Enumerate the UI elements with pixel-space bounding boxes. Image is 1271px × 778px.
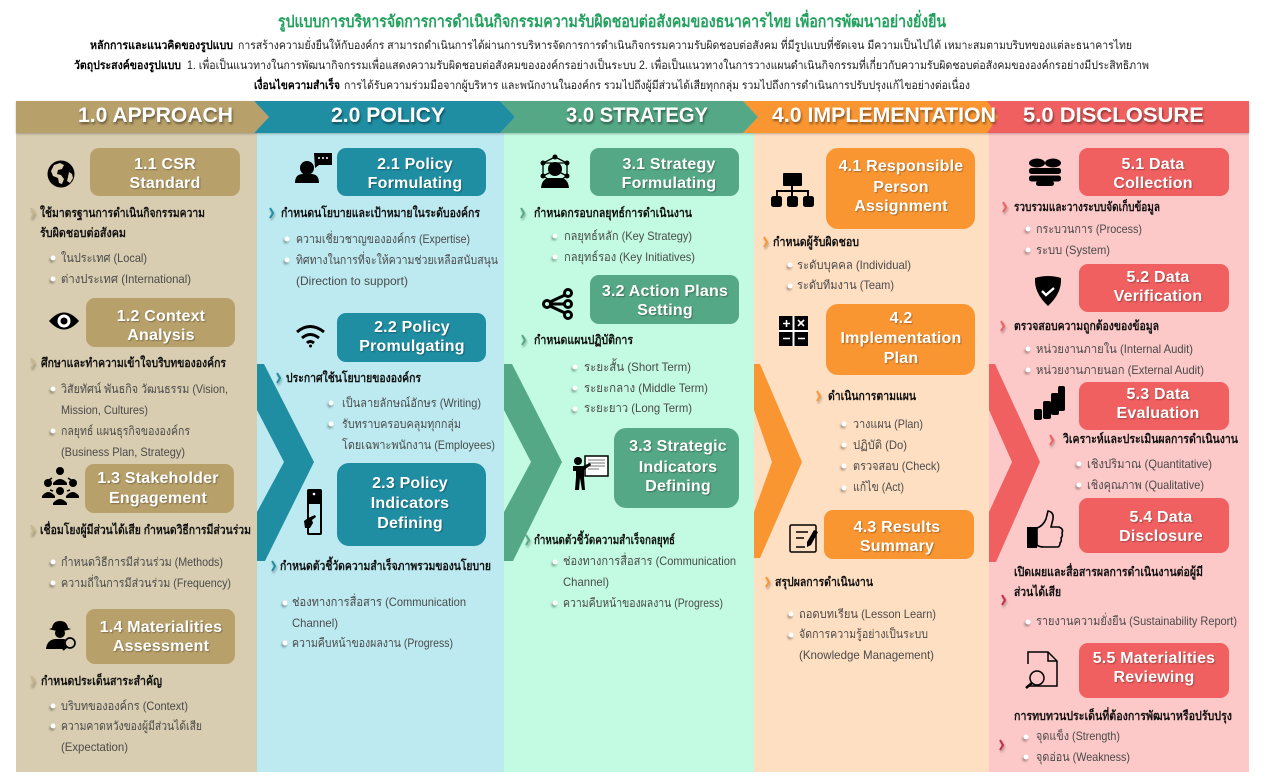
text: 3.2: ระยะยาว (Long Term) [584, 401, 692, 415]
box: 4.2 Implementation Plan: Implementation [840, 330, 962, 347]
text: 5.2: หน่วยงานภายนอก (External Audit) [1036, 363, 1204, 377]
icon: wifi [297, 326, 324, 348]
text: 1.2: Mission, Cultures) [61, 403, 148, 417]
text: 5.4 [1002, 563, 1237, 628]
text: 4.3 [766, 575, 936, 662]
text: 1.1: ในประเทศ (Local) [61, 251, 147, 265]
header: 1.0 approach: 1.0 APPROACH [78, 104, 233, 127]
text: 2.2: ประกาศใช้นโยบายขององค์กร [286, 370, 421, 385]
text: 2.1: ความเชี่ยวชาญขององค์กร (Expertise) [296, 230, 470, 246]
text: 3.1: กำหนดกรอบกลยุทธ์การดำเนินงาน [534, 205, 692, 221]
box: 3.2 Action Plans Setting: Setting [637, 302, 693, 319]
text: 2.1: ทิศทางในการที่จะให้ความช่วยเหลือสนับสนุน [296, 251, 498, 268]
text: 4.2 [817, 389, 940, 494]
text: 5.1 [1003, 199, 1160, 257]
box: 5.5 Materialities Reviewing [1079, 643, 1229, 698]
text: 3.3: กำหนดตัวชี้วัดความสำเร็จกลยุทธ์ [534, 530, 675, 548]
text: 1.2: (Business Plan, Strategy) [61, 445, 185, 459]
text: 5.1: ระบบ (System) [1036, 243, 1110, 257]
text: 1.4 [31, 673, 202, 754]
box: 2.3 Policy Indicators Defining [337, 463, 486, 546]
header: 5.0 disclosure: 5.0 DISCLOSURE [1023, 104, 1204, 127]
text: 3.1 [521, 205, 695, 265]
text: 4.3: (Knowledge Management) [799, 648, 934, 662]
header arrow band [16, 101, 1249, 133]
panel: policy content [270, 148, 498, 650]
text: 5.2 [1001, 319, 1204, 377]
text: 4.1: กำหนดผู้รับผิดชอบ [773, 235, 859, 250]
box: 1.4 Materialities Assessment [86, 609, 235, 664]
introduction text block: เงื่อนไขความสำเร็จ [254, 76, 340, 92]
text: 3.2: ระยะกลาง (Middle Term) [584, 381, 708, 395]
text: 2.1 [270, 205, 498, 288]
box: 1.1 CSR Standard [90, 148, 240, 196]
icon: presenter at board [573, 456, 608, 490]
panel: implementation content [764, 148, 975, 662]
text: 2.2: รับทราบครอบคลุมทุกกลุ่ม [342, 417, 461, 432]
text: 1.2: กลยุทธ์ แผนธุรกิจขององค์กร [61, 424, 190, 439]
box: 5.3 Data Evaluation: 5.3 Data [1127, 386, 1189, 403]
box: 4.1 Responsible Person Assignment [826, 148, 975, 229]
text: 5.3 [1050, 431, 1238, 493]
text: 3.3: ช่องทางการสื่อสาร (Communication [563, 552, 736, 568]
box: 5.5 Materialities Reviewing: Reviewing [1114, 669, 1194, 686]
text: 1.1: ต่างประเทศ (International) [61, 272, 191, 286]
box: 2.2 Policy Promulgating: Promulgating [359, 338, 465, 355]
icon: hierarchy [771, 173, 814, 207]
text: 3.3 [526, 530, 736, 610]
text: 3.2: ระยะสั้น (Short Term) [584, 358, 691, 374]
box: 2.2 Policy Promulgating: 2.2 Policy [374, 319, 450, 336]
text: 4.2: ตรวจสอบ (Check) [853, 459, 940, 473]
box: 1.4 Materialities Assessment: 1.4 Materialities [100, 619, 222, 636]
introduction text block: การสร้างความยั่งยืนให้กับองค์กร สามารถดำเนินการได้ผ่านการบริหารจัดการการดำเนินกิจกรรมความรับผิดชอบต่อสังคม ที่มีรูปแบบที่ชัดเจน มีความเป็นไปได้ เหมาะสมตามบริบทของแต่ละธนาคารไทย [238, 37, 1132, 52]
text: 5.5: จุดแข็ง (Strength) [1036, 728, 1120, 744]
text: 3.3: ความคืบหน้าของผลงาน (Progress) [563, 596, 723, 610]
text: 4.1 [764, 235, 911, 292]
icon: share nodes [544, 290, 572, 318]
box: 2.3 Policy Indicators Defining: Defining [377, 515, 443, 532]
header: 4.0 implementation: 4.0 IMPLEMENTATION [772, 104, 996, 127]
box: 3.2 Action Plans Setting [590, 275, 739, 324]
text: 5.1: รวบรวมและวางระบบจัดเก็บข้อมูล [1014, 199, 1160, 215]
text: 2.2: เป็นลายลักษณ์อักษร (Writing) [342, 395, 481, 410]
text: 1.1 [31, 205, 205, 286]
box: 5.1 Data Collection: Collection [1113, 175, 1193, 192]
text: 5.2: ตรวจสอบความถูกต้องของข้อมูล [1014, 319, 1159, 334]
box: 3.1 Strategy Formulating: Formulating [622, 175, 716, 192]
text: 1.3: กำหนดวิธีการมีส่วนร่วม (Methods) [61, 555, 223, 569]
box: 2.2 Policy Promulgating [337, 313, 486, 362]
text: 4.1: ระดับทีมงาน (Team) [797, 278, 894, 292]
introduction text block: การได้รับความร่วมมือจากผู้บริหาร และพนักงานในองค์กร รวมไปถึงผู้มีส่วนได้เสียทุกกลุ่ม รวมไปถึงการดำเนินการปรับปรุงแก้ไขอย่างต่อเนื่อง [344, 77, 970, 92]
icon: spy with magnifier [46, 621, 75, 650]
text: 1.2: วิสัยทัศน์ พันธกิจ วัฒนธรรม (Vision, [61, 382, 228, 396]
text: 5.1: กระบวนการ (Process) [1036, 222, 1142, 236]
box: 4.1 Responsible Person Assignment: 4.1 Responsible [839, 158, 963, 175]
text: 5.3: เชิงคุณภาพ (Qualitative) [1087, 478, 1204, 493]
icon: shield check [1035, 276, 1061, 306]
text: 2.3: ความคืบหน้าของผลงาน (Progress) [292, 636, 453, 650]
box: 4.2 Implementation Plan: 4.2 [890, 310, 912, 327]
box: 3.1 Strategy Formulating [590, 148, 739, 196]
box: 5.2 Data Verification [1079, 264, 1229, 312]
icon: globe [48, 160, 74, 188]
box: 1.3 Stakeholder Engagement [85, 464, 234, 513]
box: 4.2 Implementation Plan [826, 304, 975, 375]
text: 5.2: หน่วยงานภายใน (Internal Audit) [1036, 342, 1193, 356]
text: 2.1: กำหนดนโยบายและเป้าหมายในระดับองค์กร [281, 205, 480, 220]
text: 1.1: ใช้มาตรฐานการดำเนินกิจกรรมความ [40, 205, 205, 221]
text: 4.3: จัดการความรู้อย่างเป็นระบบ [799, 626, 928, 642]
text: 3.2: กำหนดแผนปฏิบัติการ [534, 333, 633, 348]
box: 4.3 Results Summary: Summary [860, 538, 934, 555]
box: 2.3 Policy Indicators Defining: 2.3 Policy [372, 475, 448, 492]
text: 1.3: ความถี่ในการมีส่วนร่วม (Frequency) [61, 574, 231, 590]
header: 2.0 policy: 2.0 POLICY [331, 104, 445, 127]
box: 1.2 Context Analysis [86, 298, 235, 347]
box: 5.1 Data Collection [1079, 148, 1229, 196]
box: 3.3 Strategic Indicators Defining [614, 428, 739, 508]
icon: thumbs up [1027, 511, 1063, 548]
text: 1.2: ศึกษาและทำความเข้าใจบริบทขององค์กร [41, 355, 226, 370]
panel: disclosure content [1000, 148, 1238, 765]
text: 5.5 [1000, 707, 1232, 765]
box: 4.3 Results Summary: 4.3 Results [854, 519, 940, 536]
box: 3.2 Action Plans Setting: 3.2 Action Plans [602, 283, 728, 300]
title: รูปแบบการบริหารจัดการการดำเนินกิจกรรมความรับผิดชอบต่อสังคมของธนาคารไทย เพื่อการพัฒนาอย่างยั่งยืน [278, 9, 947, 33]
text: 3.1: กลยุทธ์หลัก (Key Strategy) [564, 229, 692, 244]
box: 5.4 Data Disclosure: Disclosure [1119, 528, 1203, 545]
icon: eye [49, 312, 79, 330]
box: 1.2 Context Analysis: Analysis [127, 327, 195, 344]
icon: person in network [540, 154, 570, 188]
header: 3.0 strategy: 3.0 STRATEGY [566, 104, 708, 127]
box: 4.1 Responsible Person Assignment: Person [873, 179, 929, 196]
box: 4.1 Responsible Person Assignment: Assignment [854, 198, 948, 215]
box: 1.3 Stakeholder Engagement: 1.3 Stakeholder [97, 470, 219, 487]
text: 4.1: ระดับบุคคล (Individual) [797, 258, 911, 273]
text: 4.2: แก้ไข (Act) [853, 480, 904, 494]
arrow: strategy chevron [504, 364, 562, 561]
icon: hand tapping phone [304, 490, 321, 534]
text: 2.3: ช่องทางการสื่อสาร (Communication [292, 593, 466, 609]
text: 3.2 [522, 333, 708, 415]
text: 4.2: ดำเนินการตามแผน [828, 389, 916, 403]
icon: rising bars [1034, 386, 1065, 420]
box: 5.4 Data Disclosure: 5.4 Data [1130, 509, 1192, 526]
text: 2.2: โดยเฉพาะพนักงาน (Employees) [342, 438, 495, 452]
text: 5.3: วิเคราะห์และประเมินผลการดำเนินงาน [1062, 431, 1238, 446]
text: 3.1: กลยุทธ์รอง (Key Initiatives) [564, 250, 695, 265]
arrow: implementation chevron [754, 364, 802, 558]
text: 1.1: รับผิดชอบต่อสังคม [40, 226, 126, 240]
panel: strategy content [521, 148, 739, 610]
box: 3.3 Strategic Indicators Defining: Indicators [639, 459, 717, 476]
text: 1.4: ความคาดหวังของผู้มีส่วนได้เสีย [61, 719, 202, 734]
panel: approach content [31, 148, 251, 754]
box: 3.1 Strategy Formulating: 3.1 Strategy [622, 156, 716, 173]
arrow: disclosure chevron [989, 364, 1040, 562]
text: 1.3 [31, 521, 251, 590]
text: 5.3: เชิงปริมาณ (Quantitative) [1087, 457, 1212, 471]
icon: document with pen [790, 525, 818, 552]
arrow: policy chevron [257, 364, 314, 561]
box: 1.4 Materialities Assessment: Assessment [113, 638, 210, 655]
text: 3.3: Channel) [563, 575, 609, 589]
box: 3.3 Strategic Indicators Defining: 3.3 Strategic [629, 438, 727, 455]
text: 2.1: (Direction to support) [296, 274, 408, 288]
box: 5.5 Materialities Reviewing: 5.5 Materialities [1093, 650, 1215, 667]
introduction text block: วัตถุประสงค์ของรูปแบบ [74, 58, 181, 73]
box: 5.2 Data Verification: Verification [1114, 288, 1202, 305]
panel: column backgrounds [16, 133, 1249, 772]
box: 2.1 Policy Formulating: Formulating [368, 175, 462, 192]
text: 1.4: บริบทขององค์กร (Context) [61, 699, 188, 713]
text: 1.2 [31, 355, 228, 459]
text: 1.4: กำหนดประเด็นสาระสำคัญ [41, 673, 162, 688]
introduction text block [74, 37, 1149, 92]
box: 4.3 Results Summary [824, 510, 974, 559]
icon: stakeholder group [42, 467, 79, 505]
text: 4.2: วางแผน (Plan) [853, 417, 923, 431]
text: 4.3: สรุปผลการดำเนินงาน [775, 575, 873, 590]
text: 2.3: Channel) [292, 616, 338, 630]
box: 3.3 Strategic Indicators Defining: Defining [645, 478, 711, 495]
text: 5.4: ส่วนได้เสีย [1014, 584, 1061, 599]
text: 2.2 [277, 370, 495, 452]
box: 4.2 Implementation Plan: Plan [884, 350, 918, 367]
text: 4.3: ถอดบทเรียน (Lesson Learn) [799, 607, 936, 621]
icon: database [1029, 158, 1061, 186]
box: 5.3 Data Evaluation: Evaluation [1117, 405, 1199, 422]
text: 5.5: การทบทวนประเด็นที่ต้องการพัฒนาหรือปรับปรุง [1014, 707, 1232, 724]
box: 2.3 Policy Indicators Defining: Indicators [371, 495, 449, 512]
box: 5.2 Data Verification: 5.2 Data [1127, 269, 1189, 286]
box: 1.1 CSR Standard: 1.1 CSR [134, 156, 196, 173]
icon: speaker with chat bubble [295, 153, 332, 183]
box: 2.1 Policy Formulating [337, 148, 486, 196]
icon: calculator keys [779, 316, 808, 346]
introduction text block: หลักการและแนวคิดของรูปแบบ [90, 39, 233, 53]
box: 1.2 Context Analysis: 1.2 Context [117, 308, 206, 325]
text: 1.4: (Expectation) [61, 740, 128, 754]
box: 1.1 CSR Standard: Standard [130, 175, 200, 192]
box: 2.1 Policy Formulating: 2.1 Policy [377, 156, 453, 173]
text: 5.4: เปิดเผยและสื่อสารผลการดำเนินงานต่อผู้มี [1014, 563, 1203, 580]
text: 4.2: ปฏิบัติ (Do) [853, 438, 907, 452]
text: 5.4: รายงานความยั่งยืน (Sustainability Report) [1036, 612, 1237, 628]
text: 2.3: กำหนดตัวชี้วัดความสำเร็จภาพรวมของนโยบาย [280, 556, 491, 573]
box: 1.3 Stakeholder Engagement: Engagement [109, 490, 207, 507]
box: 5.1 Data Collection: 5.1 Data [1122, 156, 1184, 173]
box: 5.3 Data Evaluation [1079, 382, 1229, 430]
text: 1.3: เชื่อมโยงผู้มีส่วนได้เสีย กำหนดวิธีการมีส่วนร่วม [40, 521, 251, 538]
text: 5.5: จุดอ่อน (Weakness) [1036, 750, 1130, 765]
icon: document search [1026, 652, 1057, 688]
introduction text block: 1. เพื่อเป็นแนวทางในการพัฒนากิจกรรมเพื่อแสดงความรับผิดชอบต่อสังคมขององค์กรอย่างเป็นระบบ 2. เพื่อเป็นแนวทางในการวางแผนดำเนินกิจกรรมที่เกี่ยวกับความรับผิดชอบต่อสังคมขององค์กรอย่างมีประสิทธิภาพ [187, 57, 1149, 72]
text: 2.3 [272, 556, 491, 650]
box: 5.4 Data Disclosure [1079, 498, 1229, 553]
